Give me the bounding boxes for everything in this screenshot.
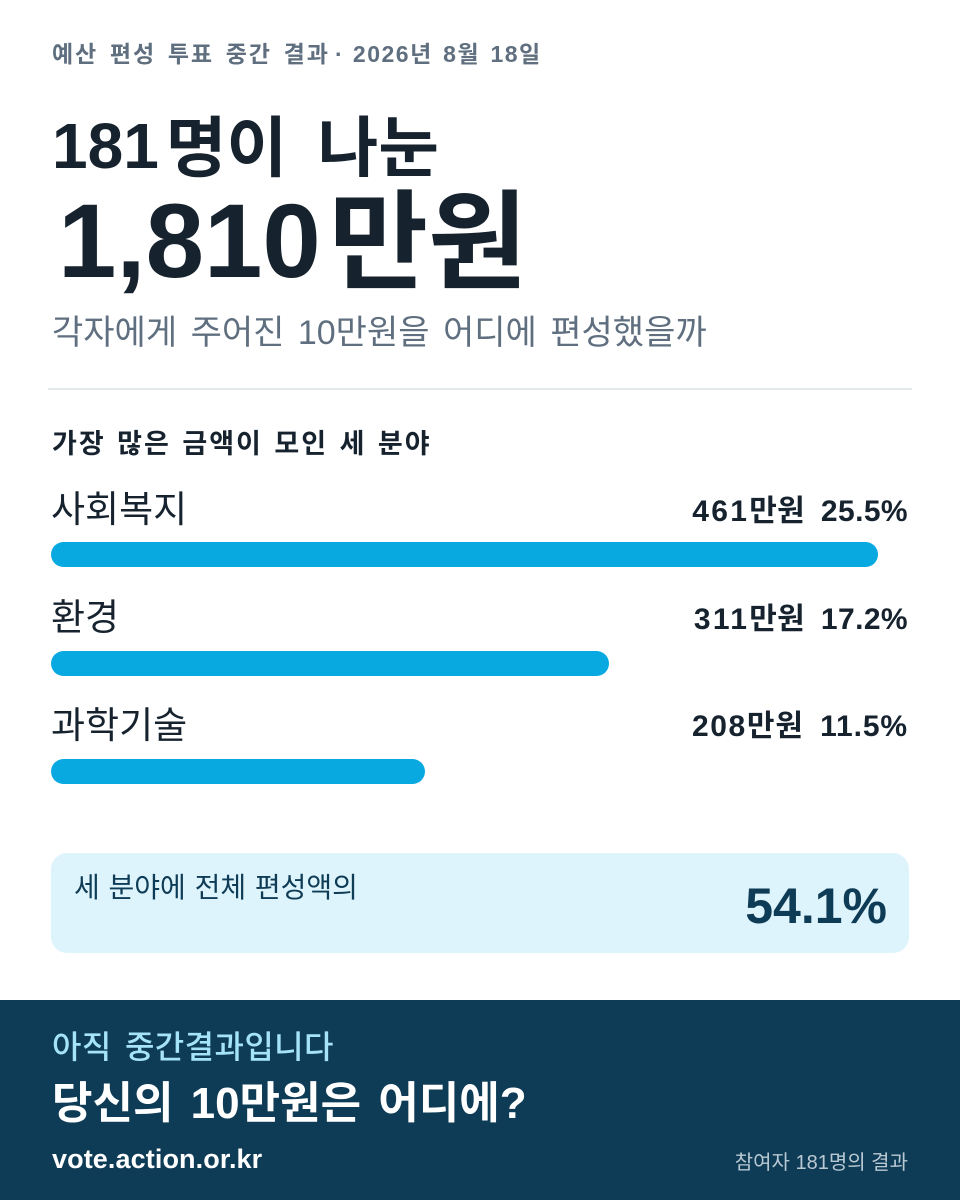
row label: environment: 환경 <box>51 597 119 638</box>
footer headline: 당신의 10만원은 어디에? <box>52 1079 527 1128</box>
callout: total share <box>51 853 909 953</box>
title line: 181 people: 181명이 나눈 <box>52 110 439 185</box>
footer note: 참여자 181명의 결과 <box>735 1152 908 1174</box>
eyebrow: date line: 예산 편성 투표 중간 결과 · 2026년 8월 18일 <box>52 41 542 67</box>
row value: environment: 311만원 17.2% <box>694 603 908 636</box>
row label: science and technology: 과학기술 <box>51 705 187 746</box>
callout label: 세 분야에 전체 편성액의 <box>74 872 358 903</box>
footer eyebrow: 아직 중간결과입니다 <box>52 1029 334 1065</box>
row label: social welfare: 사회복지 <box>51 489 187 530</box>
title number: total amount: 1,810만원 <box>58 182 528 303</box>
callout value: 54.1% <box>745 878 887 934</box>
divider <box>48 388 912 390</box>
footer url: vote.action.or.kr <box>52 1144 262 1174</box>
section heading: 가장 많은 금액이 모인 세 분야 <box>52 429 432 459</box>
footer panel <box>0 1000 960 1200</box>
panel: bar chart <box>51 489 908 784</box>
bar: environment <box>51 651 609 676</box>
row value: science and technology: 208만원 11.5% <box>692 710 908 743</box>
bar: social welfare <box>51 542 878 567</box>
bar: science and technology <box>51 759 425 784</box>
subtitle: 각자에게 주어진 10만원을 어디에 편성했을까 <box>52 314 707 352</box>
row value: social welfare: 461만원 25.5% <box>692 495 908 528</box>
